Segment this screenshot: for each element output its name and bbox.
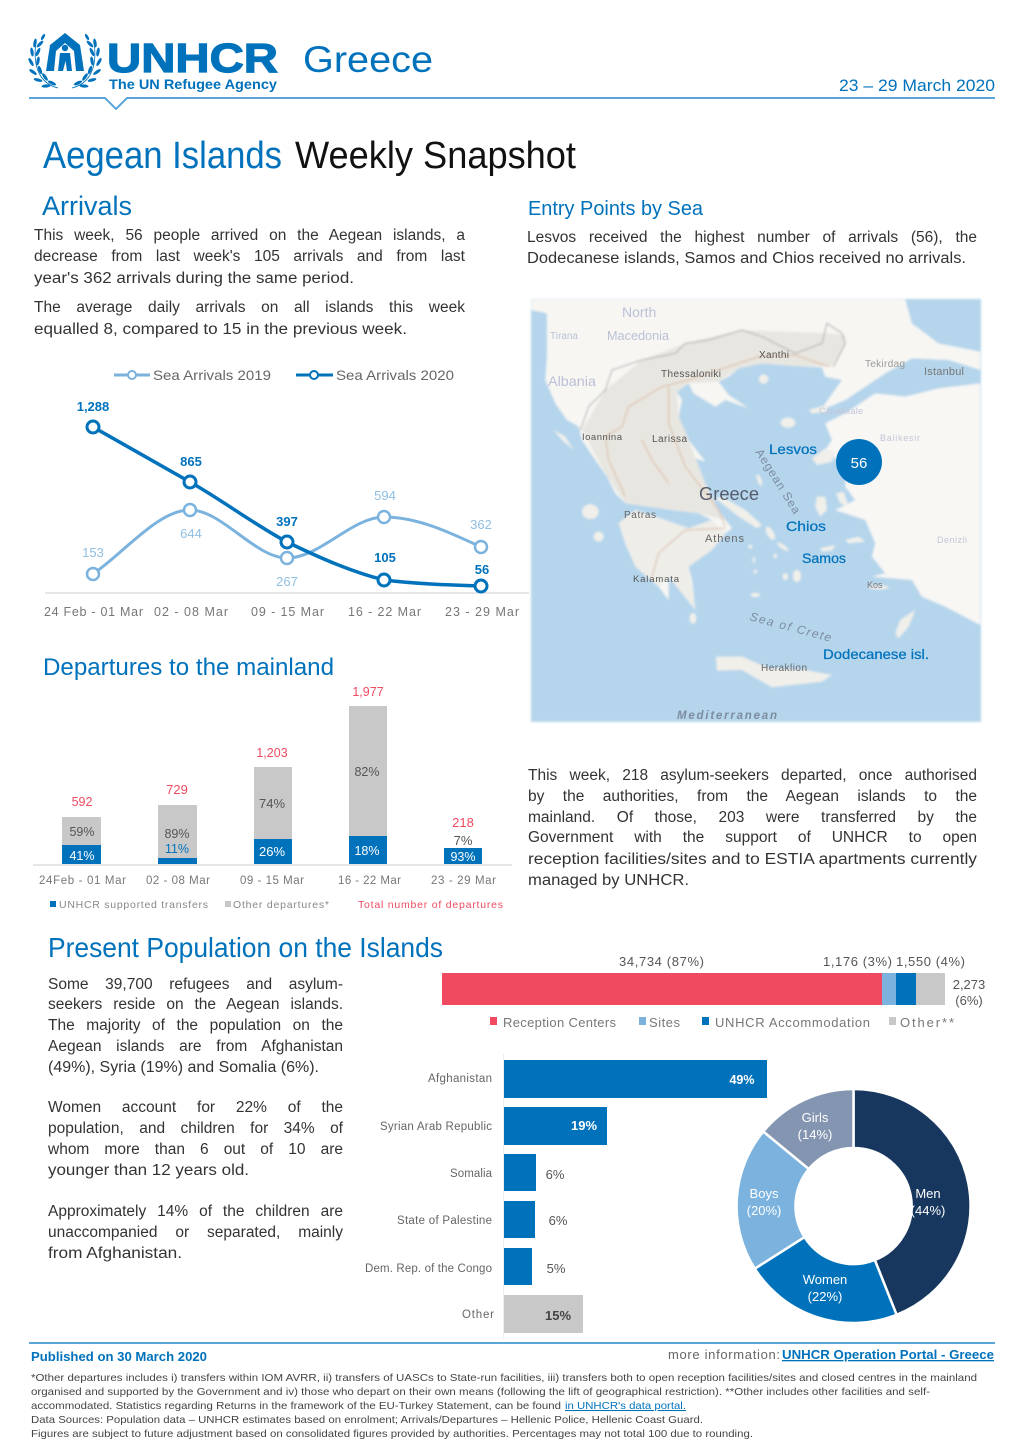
logo wordmark: UNHCR [107,35,278,81]
slice Girls [763,1089,854,1169]
text block: population: Women account for 22% of the [48,1099,343,1116]
bar Syrian Arab Republic: Syrian Arab Republic [380,1121,492,1133]
bar 23 - 29 Mar [444,815,482,864]
bar Somalia: Somalia [450,1168,493,1180]
bar 24 Feb - 01 Mar: 59% [69,825,95,839]
map: island labels: Lesvos [769,441,817,457]
text block: departures [528,766,977,889]
text block: population: Some 39,700 refugees and asylum- [48,976,343,993]
legend: UNHCR supported transfers [59,899,208,911]
bar 02 - 08 Mar [158,782,197,864]
axis labels: 02 - 08 Mar [146,875,210,887]
text block: arrivals [34,226,465,338]
Greek mainland shading [582,330,845,520]
text block: departures: Government with the support of UNHCR to open [528,829,977,846]
more information link [668,1347,994,1362]
bar 23 - 29 Mar: 93% [450,850,476,864]
slice Women [755,1237,897,1323]
stacked bar: accommodation: 1,550 (4%) [896,954,965,969]
bar 09 - 15 Mar: 74% [259,796,285,811]
text block: departures: by the authorities, from the Aegean islands to the [528,788,977,805]
map: place labels [548,304,967,722]
text block: departures: This week, 218 asylum-seekers departed, once authorised [528,767,977,784]
stacked bar: accommodation: 2,273 [953,977,985,992]
axis labels [39,875,496,887]
map: place labels: Athens [705,533,744,545]
bar Somalia: 6% [546,1167,565,1182]
series 2020: 1,288 [77,399,109,414]
footer [31,1347,994,1440]
stacked bar: accommodation [442,954,985,1030]
map: place labels: Larissa [652,434,687,445]
map: place labels: Heraklion [761,663,807,674]
legend: Reception Centers [503,1015,616,1030]
bar 23 - 29 Mar: 7% [454,833,473,848]
slice Men [854,1089,971,1315]
heading: present population: Present Population on the Islands [48,932,443,963]
map: place labels: Denizli [937,535,967,545]
map: place labels: Ioannina [582,432,623,443]
donut labels: Men [915,1186,941,1201]
map: place labels: Tekirdag [865,359,905,370]
bar 23 - 29 Mar: 218 [452,815,474,830]
text block: population: Approximately 14% of the children are [48,1203,343,1220]
text block: population: whom more than 6 out of 10 are [48,1141,343,1158]
map: place labels: Mediterranean [677,710,777,722]
heading: entry points: Entry Points by Sea [528,197,704,220]
text block: entry points: Lesvos received the highest number of arrivals (56), the [527,229,977,246]
bar Somalia [450,1154,565,1191]
donut chart: age and gender [737,1089,971,1323]
footnotes: *Other departures includes i) transfers within IOM AVRR, ii) transfers of UASCs to State-run facilities, iii) transfers both to open reception facilities/sites and closed centres in the mainland [31,1372,977,1384]
bar 24 Feb - 01 Mar: 592 [72,795,92,809]
bar 02 - 08 Mar: 11% [165,842,189,856]
series 2020: 105 [374,550,396,565]
donut labels: (20%) [747,1203,781,1218]
bar Other: 15% [545,1308,571,1323]
map: island labels: Chios [786,518,826,534]
donut labels: (14%) [798,1127,832,1142]
country name: Greece [303,39,433,80]
bar 09 - 15 Mar [254,746,292,864]
series 2020 [77,399,489,592]
more information link: more information: [668,1347,780,1362]
bar 16 - 22 Mar: 82% [354,765,380,779]
legend: Other departures* [233,899,329,911]
legend [490,1015,954,1030]
series 2020: 397 [276,514,298,529]
map: place labels: Sea of Crete [748,609,833,645]
bar 16 - 22 Mar: 18% [354,844,380,858]
donut labels: (22%) [808,1289,842,1304]
axis labels: 24 Feb - 01 Mar [44,605,143,619]
map: place labels: Thessaloniki [661,369,721,380]
donut labels: (44%) [911,1203,945,1218]
series 2020: 865 [180,454,202,469]
legend: Sites [649,1015,680,1030]
text block: departures: reception facilities/sites and to ESTIA apartments currently [528,851,977,868]
bar Dem. Rep. of the Congo [365,1248,566,1285]
axis labels: 23 - 29 Mar [431,875,496,887]
footnotes: organised and supported by the Government and iv) those who depart on their own means (following the lift of geographical restriction). **Other includes other facilities and self- [31,1386,931,1398]
text block: population: unaccompanied or separated, mainly [48,1224,343,1241]
more information link: UNHCR Operation Portal - Greece [782,1347,994,1362]
axis labels: 16 - 22 Mar [338,875,401,887]
stacked bar chart: departures [33,685,512,911]
map: place labels: Xanthi [759,350,789,361]
date: 23 – 29 March 2020 [839,76,995,95]
map: place labels: North [622,304,656,320]
map: place labels: Kos [867,580,883,590]
footnotes: in UNHCR's data portal. [565,1400,686,1412]
series 2020: 56 [475,562,489,577]
logo tagline: The UN Refugee Agency [109,76,277,92]
axis labels: 23 - 29 Mar [445,605,519,619]
bar Syrian Arab Republic: 19% [571,1118,597,1133]
text block: population: younger than 12 years old. [48,1162,249,1179]
title: Weekly Snapshot [295,135,576,177]
footnotes [31,1372,977,1440]
donut labels: Women [803,1272,847,1287]
text block: arrivals: equalled 8, compared to 15 in the previous week. [34,321,407,338]
bar Other: Other [462,1309,494,1321]
title [43,135,576,177]
text block: population: seekers reside on the Aegean islands. [48,996,343,1013]
axis labels: 16 - 22 Mar [348,605,421,619]
bar State of Palestine: State of Palestine [397,1215,492,1227]
map: place labels: Istanbul [924,366,964,378]
axis labels: 09 - 15 Mar [240,875,304,887]
map: place labels: Aegean Sea [752,446,804,517]
map: place labels: Albania [548,373,596,389]
chart legend: Sea Arrivals 2020 [336,367,454,383]
bar 16 - 22 Mar [349,685,387,864]
text block: arrivals: decrease from last week's 105 arrivals and from last [34,248,465,265]
donut labels [747,1110,945,1304]
bar 09 - 15 Mar: 26% [259,844,285,859]
bar State of Palestine: 6% [549,1213,568,1228]
heading: departures: Departures to the mainland [43,654,334,681]
axis labels: 09 - 15 Mar [251,605,324,619]
series 2019: 267 [276,574,298,589]
series 2019 [82,488,492,589]
bar Afghanistan: 49% [729,1073,755,1087]
text block: population [48,975,343,1262]
chart legend: Sea Arrivals 2019 [153,367,271,383]
text block: population: (49%), Syria (19%) and Somalia (6%). [48,1059,319,1076]
map: Greece and Aegean [531,299,981,722]
bar Syrian Arab Republic [380,1107,607,1145]
publication date: Published on 30 March 2020 [31,1349,207,1364]
slice Boys [737,1132,809,1269]
bar chart: countries of origin [365,1054,767,1339]
header [27,33,995,95]
axis labels [44,605,519,619]
footnotes: Figures are subject to future adjustment based on consolidated figures provided by authorities. Percentages may not total 100 due to rounding. [31,1428,753,1440]
legend: UNHCR Accommodation [715,1015,870,1030]
stacked bar: accommodation: (6%) [955,993,983,1008]
map: island labels: Dodecanese isl. [823,646,929,662]
stacked bar: accommodation: 1,176 (3%) [823,954,892,969]
bar Dem. Rep. of the Congo: 5% [547,1261,566,1276]
map: marker Lesvos 56: 56 [851,455,867,472]
map: place labels: Tirana [550,331,578,342]
legend: Total number of departures [358,899,503,911]
bar 24 Feb - 01 Mar [62,795,101,864]
bar 16 - 22 Mar: 1,977 [352,685,384,699]
legend: Other** [900,1015,954,1030]
footnotes: Data Sources: Population data – UNHCR estimates based on enrolment; Arrivals/Departures – Hellenic Police, Hellenic Coast Guard. [31,1414,703,1426]
chart legend [114,367,454,383]
text block: entry points: Dodecanese islands, Samos and Chios received no arrivals. [527,250,966,267]
bar 02 - 08 Mar: 729 [166,782,188,797]
series 2019: 362 [470,517,492,532]
text block: arrivals: year's 362 arrivals during the same period. [34,270,354,287]
heading: arrivals: Arrivals [42,191,132,221]
donut labels: Girls [802,1110,829,1125]
axis labels: 24Feb - 01 Mar [39,875,126,887]
series 2019: 153 [82,545,104,560]
text block: entry points [527,228,977,267]
map: place labels: Patras [624,510,656,521]
text block: population: from Afghanistan. [48,1245,182,1262]
bar State of Palestine [397,1201,568,1238]
map: place labels: Balikesir [880,433,920,443]
text block: departures: mainland. Of those, 203 were transferred by the [528,809,977,826]
axis labels: 02 - 08 Mar [154,605,228,619]
series 2019: 594 [374,488,396,503]
series 2019: 644 [180,526,202,541]
map: marker Lesvos 56 [836,439,882,485]
text block: population: population, and children for 34% of [48,1120,343,1137]
map: place labels: Greece [699,484,759,504]
bar 02 - 08 Mar: 89% [164,827,190,841]
legend [50,899,503,911]
map: island labels: Samos [802,550,846,566]
text block: population: Aegean islands are from Afghanistan [48,1038,343,1055]
donut labels: Boys [750,1186,779,1201]
text block: population: The majority of the population on the [48,1017,343,1034]
text block: arrivals: The average daily arrivals on all islands this week [34,299,465,316]
text block: departures: managed by UNHCR. [528,872,689,889]
bar Afghanistan [428,1060,767,1098]
bar Dem. Rep. of the Congo: Dem. Rep. of the Congo [365,1263,492,1275]
stacked bar: accommodation: 34,734 (87%) [619,954,704,969]
text block: arrivals: This week, 56 people arrived on the Aegean islands, a [34,227,465,244]
map: place labels: Macedonia [607,328,670,343]
line chart: sea arrivals [44,367,529,619]
map: place labels: Canakkale [819,406,863,416]
icon: UNHCR logo emblem [27,33,103,88]
bar 09 - 15 Mar: 1,203 [256,746,288,760]
bar Other [462,1295,583,1333]
bar Afghanistan: Afghanistan [428,1073,492,1085]
bar 24 Feb - 01 Mar: 41% [69,849,95,863]
map: island labels [769,441,929,662]
title: Aegean Islands [43,135,282,177]
map: place labels: Kalamata [633,574,680,585]
footnotes: accommodated. Statistics regarding Returns in the framework of the EU-Turkey Statement, can be found [31,1400,561,1412]
